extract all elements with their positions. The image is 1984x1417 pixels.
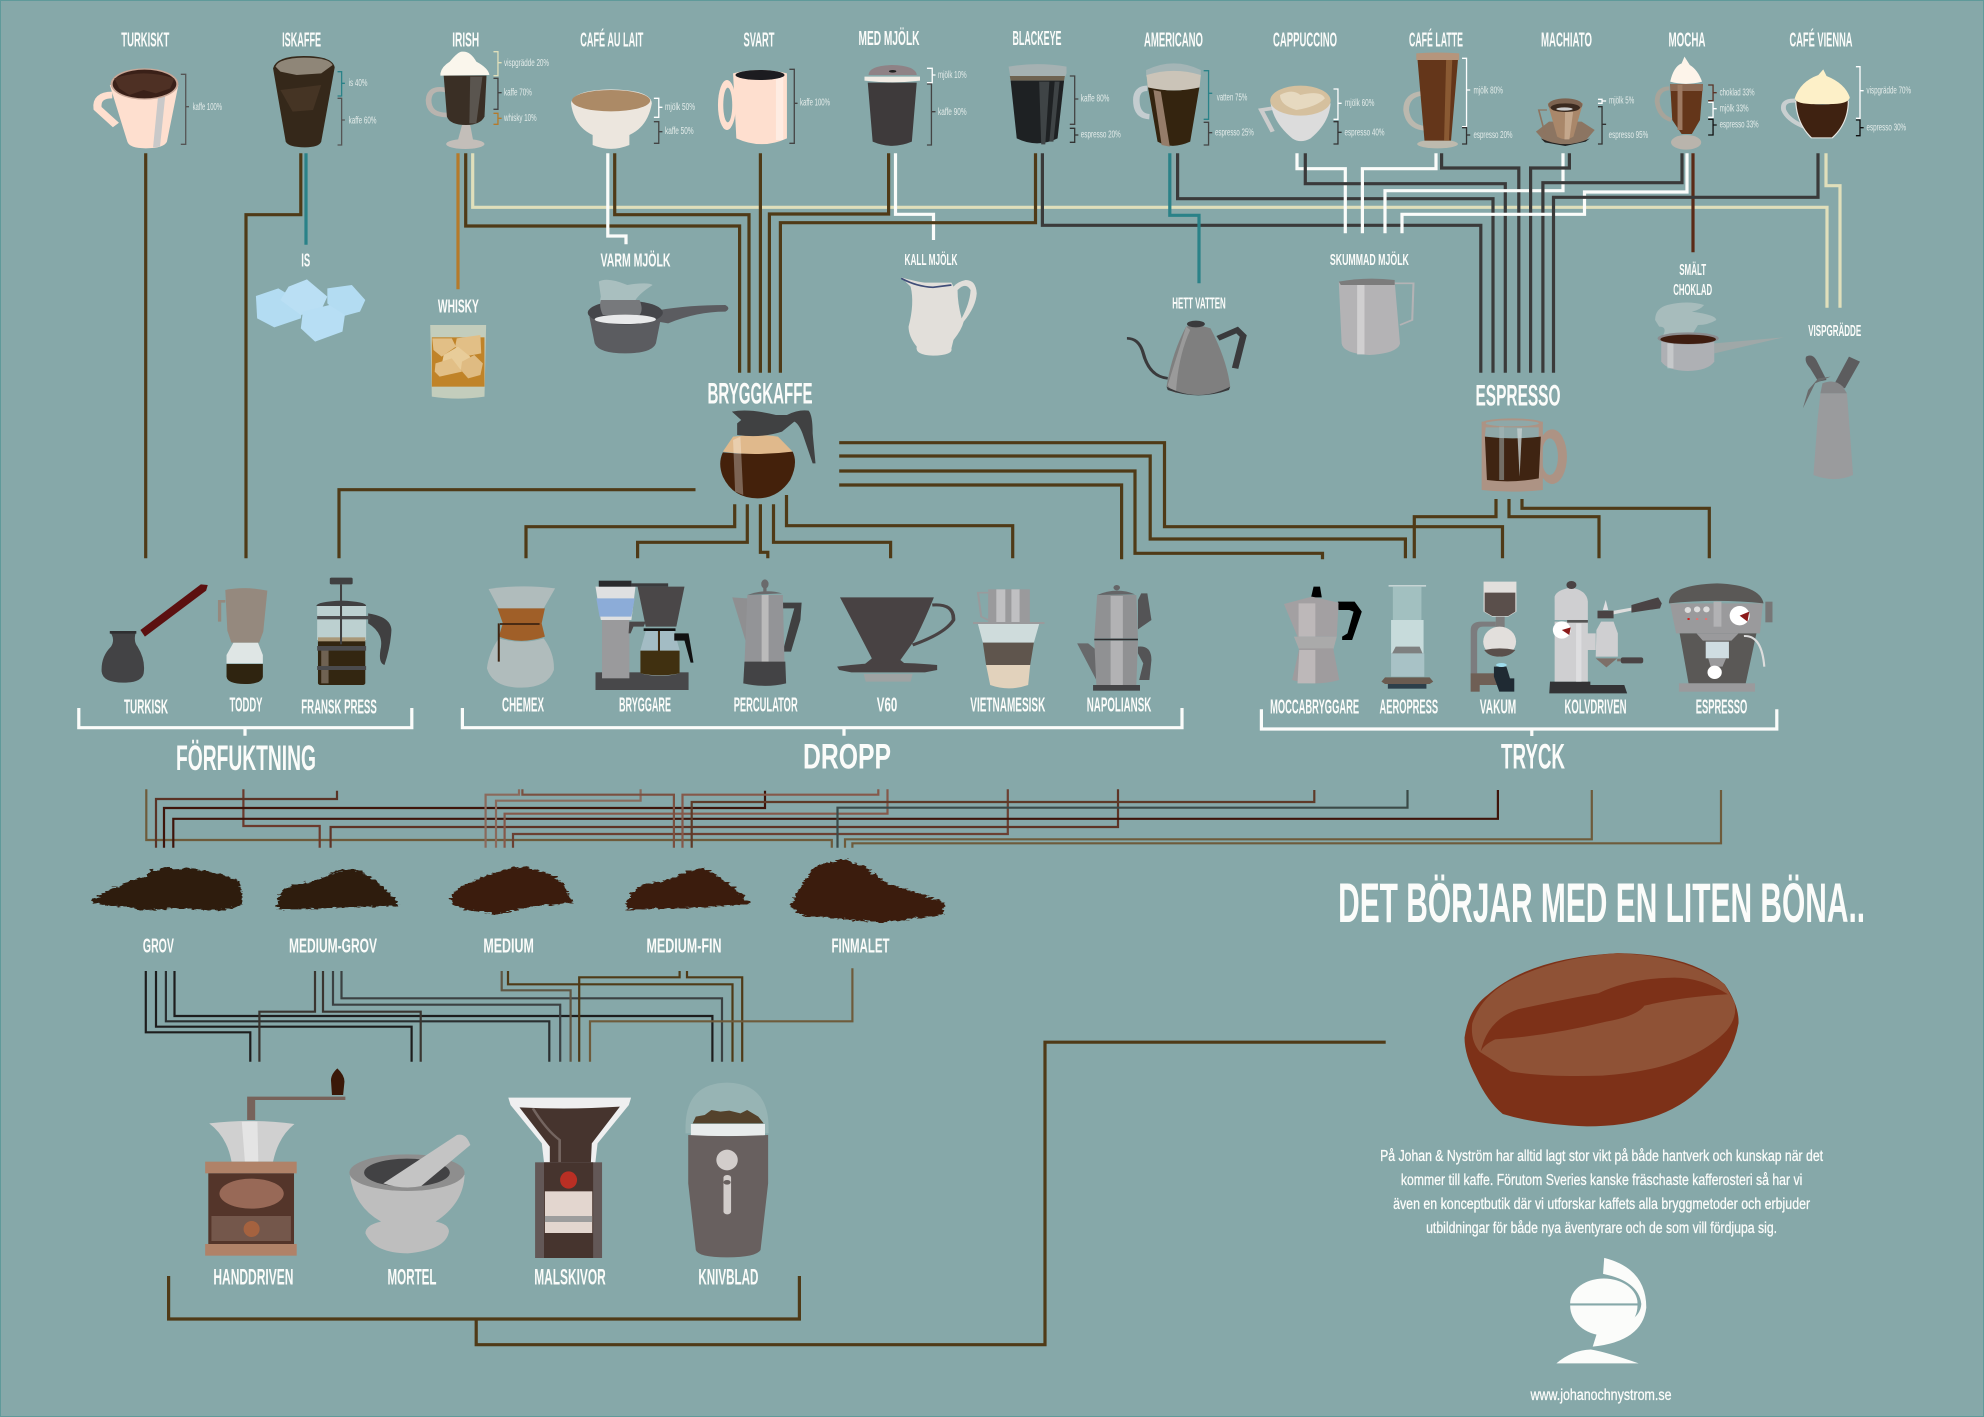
icon: french press bbox=[316, 578, 391, 685]
label: VAKUM bbox=[1480, 696, 1516, 718]
ingredient: vispgrädde bbox=[1803, 322, 1861, 479]
percentage label: espresso 33% bbox=[1720, 120, 1759, 131]
drink: blackeye: BLACKEYE bbox=[1012, 28, 1062, 50]
heading: ESPRESSO bbox=[1476, 380, 1560, 413]
label: MORTEL bbox=[388, 1264, 436, 1289]
percentage label: mjölk 50% bbox=[665, 102, 695, 113]
connector: cappuccino to skummad mjölk bbox=[1297, 153, 1345, 233]
icon: mocha glass bbox=[1657, 57, 1717, 150]
heading: TRYCK bbox=[1501, 737, 1565, 776]
connector: bryggkaffe to fransk press bbox=[339, 490, 696, 558]
brew method: turkisk bbox=[102, 584, 208, 718]
connector: bryggkaffe to v60 bbox=[774, 504, 891, 558]
label: FINMALET bbox=[832, 936, 890, 958]
percentage label: kaffe 60% bbox=[349, 115, 376, 126]
brew method: chemex bbox=[487, 586, 555, 717]
percentage label: vatten 75% bbox=[1217, 93, 1247, 104]
icon: irish glass bbox=[429, 52, 502, 149]
connector: grov to knivblad bbox=[174, 971, 712, 1062]
grinder: knivblad bbox=[686, 1083, 769, 1289]
brew method: espresso machine: ESPRESSO bbox=[1696, 696, 1747, 718]
drink: mocha bbox=[1657, 30, 1759, 150]
group: förfuktning bbox=[79, 578, 412, 778]
brew method: chemex: CHEMEX bbox=[502, 695, 544, 717]
percentage label: kaffe 100% bbox=[193, 102, 222, 113]
grinder: handdriven bbox=[205, 1068, 345, 1289]
connector: café au lait to bryggkaffe bbox=[615, 153, 749, 373]
connector: bryggkaffe to vakum bbox=[839, 443, 1502, 558]
connector: chemex to medium bbox=[486, 789, 519, 848]
brew method: perculator bbox=[732, 579, 802, 717]
percentage label: mjölk 10% bbox=[938, 70, 967, 81]
text block: intro: kommer till kaffe. Förutom Sveries kanske fräschaste kafferosteri så har vi bbox=[1401, 1171, 1802, 1189]
connector: espresso to kolvdriven bbox=[1509, 499, 1599, 558]
percentage label: mjölk 80% bbox=[1474, 85, 1503, 96]
label: MALSKIVOR bbox=[534, 1264, 606, 1289]
bracket bbox=[462, 708, 1182, 736]
brew method: fransk press: FRANSK PRESS bbox=[301, 696, 377, 718]
icon: coffee heap bbox=[278, 868, 399, 909]
brew method: napoliansk bbox=[1077, 585, 1152, 717]
connector: vakum to grov bbox=[173, 790, 1498, 848]
percentage label: espresso 40% bbox=[1344, 127, 1385, 138]
brew method: bryggare: BRYGGARE bbox=[619, 695, 671, 717]
percentage label: mjölk 60% bbox=[1345, 98, 1374, 109]
icon: coffee heap bbox=[92, 867, 242, 911]
text block: intro: även en konceptbutik där vi utforskar kaffets alla bryggmetoder och erbjuder bbox=[1393, 1196, 1811, 1213]
drink: turkiskt bbox=[97, 30, 222, 148]
connector: grinders to bean bbox=[169, 1042, 1386, 1345]
bracket bbox=[79, 708, 412, 736]
brew method: toddy: TODDY bbox=[230, 695, 263, 717]
icon: cup bbox=[97, 68, 189, 148]
icon: whisky glass bbox=[430, 325, 486, 399]
ingredient: varm mjölk bbox=[588, 251, 728, 353]
brew method: fransk press bbox=[301, 578, 391, 718]
icon: neapolitan flip pot bbox=[1077, 585, 1151, 691]
label: WHISKY bbox=[438, 297, 479, 317]
icon: toddy brewer bbox=[218, 588, 267, 684]
connector: iskaffe to is bbox=[304, 153, 308, 245]
label: MEDIUM bbox=[483, 936, 534, 958]
connector: café vienna to espresso bbox=[1554, 153, 1818, 373]
logo: globe with bean bbox=[1556, 1258, 1646, 1363]
percentage label: espresso 20% bbox=[1081, 130, 1121, 141]
connector: bryggkaffe to vietnamesisk bbox=[786, 495, 1013, 558]
connector: bryggkaffe to napoliansk bbox=[839, 485, 1122, 559]
label: VISPGRÄDDE bbox=[1808, 322, 1861, 340]
icon: chemex bbox=[487, 586, 555, 688]
brew method: espresso machine bbox=[1669, 583, 1772, 718]
percentage label: whisky 10% bbox=[503, 113, 537, 124]
connector: v60 to medium bbox=[505, 789, 888, 848]
icon: coffee heap bbox=[627, 868, 749, 909]
connector: blackeye to espresso bbox=[1042, 153, 1481, 373]
percentage label: vispgrädde 20% bbox=[504, 58, 549, 69]
percentage label: kaffe 90% bbox=[938, 107, 967, 118]
grinder: malskivor bbox=[508, 1098, 631, 1289]
connector: blackeye to bryggkaffe bbox=[780, 153, 1036, 373]
icon: phin filter bbox=[973, 589, 1044, 688]
percentage label: espresso 30% bbox=[1866, 123, 1906, 134]
drink: svart bbox=[718, 30, 830, 144]
connector: mocha to espresso bbox=[1543, 153, 1682, 373]
text block: intro: utbildningar för både nya äventyrare och de som vill fördjupa sig. bbox=[1426, 1219, 1777, 1237]
brew method: moccabryggare bbox=[1270, 587, 1362, 718]
ingredient: whisky bbox=[430, 297, 486, 399]
connector: bryggkaffe to moccabryggare bbox=[839, 471, 1322, 559]
connector: espresso to espressomaskin bbox=[1522, 499, 1709, 558]
connector: fransk press to grov bbox=[156, 791, 337, 848]
connector: medium to malskivor bbox=[502, 971, 571, 1062]
label: IS bbox=[301, 251, 310, 271]
panel: det börjar med en liten böna bbox=[1338, 871, 1865, 1404]
icon: cup on saucer bbox=[1536, 98, 1606, 146]
connector: espresso machine to finmalet bbox=[852, 790, 1721, 848]
website: www.johanochnystrom.se bbox=[1530, 1387, 1672, 1404]
connector: medium-grov to malskivor bbox=[333, 971, 560, 1062]
group: tryck: MOCCABRYGGARE bbox=[1270, 696, 1359, 718]
group: tryck: AEROPRESS bbox=[1380, 696, 1438, 718]
icon: cup with latte art bbox=[1261, 86, 1331, 141]
connector: chemex to medium-fin bbox=[522, 789, 674, 848]
ingredient: kall mjölk bbox=[901, 250, 977, 356]
connector: vietnamesisk to medium bbox=[513, 789, 1008, 848]
label: GROV bbox=[143, 936, 174, 958]
connector: aeropress to finmalet bbox=[838, 790, 1408, 848]
drink: café au lait bbox=[571, 29, 695, 149]
label: KALL MJÖLK bbox=[904, 250, 958, 269]
icon: pan with chocolate bbox=[1655, 302, 1784, 371]
heading: MED MJÖLK bbox=[858, 27, 920, 50]
grind: medium-grov bbox=[278, 868, 399, 958]
bracket bbox=[1261, 709, 1777, 736]
icon: siphon brewer bbox=[1471, 582, 1516, 692]
percentage label: kaffe 80% bbox=[1081, 94, 1109, 105]
drink: turkiskt: TURKISKT bbox=[121, 30, 169, 52]
label: VARM MJÖLK bbox=[600, 251, 670, 271]
icon: glass mug bbox=[1482, 418, 1567, 492]
drink: americano bbox=[1136, 30, 1254, 147]
icon: coffee bean bbox=[1465, 953, 1739, 1126]
icon: ice cubes bbox=[256, 279, 365, 342]
drink: café vienna bbox=[1783, 29, 1911, 138]
connector: bryggkaffe to bryggare bbox=[638, 504, 747, 558]
grind: finmalet bbox=[790, 859, 945, 958]
drink: cappuccino: CAPPUCCINO bbox=[1273, 30, 1337, 52]
grind: medium-fin bbox=[627, 868, 749, 958]
connector: café au lait to varm mjölk bbox=[608, 153, 626, 244]
drink: svart: SVART bbox=[744, 30, 774, 52]
heading: IRISH bbox=[452, 30, 479, 52]
icon: cream siphon bbox=[1803, 356, 1860, 479]
connector: mocha to smält choklad bbox=[1691, 153, 1695, 252]
icon: milk jug bbox=[901, 277, 977, 356]
connector: bryggkaffe to aeropress bbox=[839, 456, 1405, 558]
connector: med mjölk to bryggkaffe bbox=[769, 153, 889, 373]
percentage label: kaffe 70% bbox=[504, 88, 532, 99]
icon: mug bbox=[718, 69, 798, 144]
connector: v60 to medium-fin bbox=[682, 789, 878, 848]
percentage label: choklad 33% bbox=[1720, 88, 1755, 99]
icon: hand mill bbox=[205, 1068, 345, 1256]
icon: tall glass bbox=[1009, 64, 1078, 144]
percentage label: vispgrädde 70% bbox=[1866, 86, 1911, 97]
connector: irish to vispgrädde bbox=[473, 153, 1827, 308]
connectors: drinks to ingredients and base coffee bbox=[146, 153, 1840, 558]
drink: med mjölk bbox=[858, 27, 967, 146]
icon: v60 dripper bbox=[837, 597, 953, 682]
percentage label: kaffe 100% bbox=[800, 98, 830, 109]
icon: latte glass bbox=[1406, 52, 1470, 148]
ingredient: skummad mjölk bbox=[1330, 250, 1413, 355]
brew method: vietnamesisk bbox=[970, 589, 1046, 717]
drink: blackeye bbox=[1009, 28, 1121, 144]
percentage label: mjölk 5% bbox=[1609, 96, 1634, 107]
icon: moka pot bbox=[1284, 587, 1362, 683]
connector: finmalet to malskivor bbox=[590, 968, 852, 1062]
drink: irish bbox=[429, 30, 549, 149]
ingredient: smält choklad bbox=[1655, 261, 1784, 371]
icon: coffee heap bbox=[451, 866, 573, 914]
group: tryck bbox=[1261, 581, 1777, 776]
connector: espresso to aeropress bbox=[1414, 499, 1496, 558]
connector: bryggare to medium bbox=[496, 789, 641, 848]
connector: grov to handdriven bbox=[146, 971, 250, 1062]
connector: napoliansk to medium-grov bbox=[331, 789, 1118, 848]
label: MEDIUM-FIN bbox=[646, 936, 722, 958]
brackets bbox=[1333, 89, 1342, 144]
group: dropp: NAPOLIANSK bbox=[1087, 695, 1152, 717]
label: MEDIUM-GROV bbox=[289, 936, 377, 958]
group: dropp bbox=[462, 579, 1182, 776]
ingredient: hett vatten bbox=[1127, 295, 1243, 395]
icon: burr grinder bbox=[508, 1098, 631, 1258]
icon: blade grinder bbox=[686, 1083, 769, 1257]
connector: turkisk to finmalet bbox=[146, 789, 832, 848]
connector: kolvdriven to finmalet bbox=[845, 790, 1592, 848]
connector: grov to mortel bbox=[156, 971, 412, 1062]
label: SKUMMAD MJÖLK bbox=[1330, 250, 1409, 269]
heading: BRYGGKAFFE bbox=[708, 377, 812, 410]
connector: medium-grov to mortel bbox=[323, 971, 421, 1062]
connector: medium-fin to knivblad bbox=[687, 971, 742, 1062]
brew method: turkisk: TURKISK bbox=[124, 696, 168, 718]
icon: espresso machine bbox=[1669, 583, 1772, 692]
drink: café latte: CAFÉ LATTE bbox=[1409, 29, 1463, 52]
drink: mocha: MOCHA bbox=[1668, 30, 1706, 52]
drink: machiato: MACHIATO bbox=[1541, 30, 1592, 52]
percentage label: espresso 25% bbox=[1215, 127, 1254, 138]
icon: lever machine bbox=[1549, 581, 1662, 693]
icon: cup with cream bbox=[1783, 67, 1864, 138]
connectors: bryggkaffe and espresso to brew methods bbox=[339, 443, 1709, 559]
connector: americano to espresso bbox=[1178, 153, 1493, 373]
connector: bryggkaffe to perculator bbox=[760, 504, 768, 558]
icon: coffee maker bbox=[596, 581, 693, 690]
percentage label: mjölk 33% bbox=[1720, 104, 1749, 115]
icon: saucepan bbox=[588, 280, 728, 353]
icon: cezve bbox=[102, 584, 208, 683]
base: espresso bbox=[1476, 380, 1567, 492]
grinder: mortel bbox=[349, 1135, 470, 1289]
connector: café vienna to vispgrädde bbox=[1826, 153, 1840, 308]
label: HANDDRIVEN bbox=[213, 1264, 293, 1289]
grind: grov bbox=[92, 867, 242, 958]
label: V60 bbox=[877, 695, 897, 717]
brew method: aeropress bbox=[1380, 585, 1438, 718]
percentage label: espresso 20% bbox=[1474, 130, 1513, 141]
connector: medium to knivblad bbox=[508, 971, 732, 1062]
connectors: brew methods to grind sizes bbox=[146, 789, 1721, 848]
connector: mocha to skummad mjölk bbox=[1402, 153, 1687, 233]
icon: bowl bbox=[571, 89, 662, 149]
connector: perculator to grov bbox=[164, 791, 765, 848]
connector: irish to bryggkaffe bbox=[466, 153, 740, 373]
ingredient: hett vatten: HETT VATTEN bbox=[1172, 295, 1226, 312]
connector: toddy to medium-grov bbox=[243, 789, 320, 848]
ingredient: smält choklad: CHOKLAD bbox=[1673, 282, 1712, 299]
icon: kettle bbox=[1127, 321, 1243, 395]
connector: svart to bryggkaffe bbox=[759, 153, 762, 373]
brew method: bryggare bbox=[596, 581, 693, 717]
connector: medium-grov to handdriven bbox=[259, 971, 315, 1062]
drink: café latte bbox=[1406, 29, 1513, 148]
connector: turkiskt to turkisk bbox=[144, 153, 147, 558]
drink: iskaffe bbox=[273, 30, 376, 147]
drink: iskaffe: ISKAFFE bbox=[282, 30, 321, 52]
connector: irish to whisky bbox=[456, 153, 460, 289]
heading: DROPP bbox=[803, 737, 891, 776]
base: bryggkaffe bbox=[708, 377, 816, 498]
brew method: toddy bbox=[218, 588, 267, 717]
connectors: grind sizes to grinders bbox=[146, 968, 852, 1062]
drink: cappuccino bbox=[1261, 30, 1385, 144]
icon: iced glass bbox=[273, 56, 345, 147]
connector: machiato to espresso bbox=[1531, 153, 1569, 373]
connector: medium-grov to knivblad bbox=[342, 971, 722, 1062]
connector: machiato to skummad mjölk bbox=[1385, 153, 1563, 233]
connector: café latte to skummad mjölk bbox=[1362, 153, 1436, 233]
group: dropp: PERCULATOR bbox=[734, 695, 798, 717]
label: KNIVBLAD bbox=[698, 1264, 758, 1289]
text block: intro bbox=[1380, 1147, 1824, 1237]
ingredient: is bbox=[256, 251, 365, 342]
connector: med mjölk to kall mjölk bbox=[896, 153, 934, 240]
brew method: kolvdriven: KOLVDRIVEN bbox=[1564, 696, 1626, 718]
icon: coffee heap bbox=[790, 859, 945, 922]
drink: café vienna: CAFÉ VIENNA bbox=[1790, 29, 1852, 52]
brew method: vakum bbox=[1471, 582, 1516, 718]
grind: medium bbox=[451, 866, 573, 958]
drink: café au lait: CAFÉ AU LAIT bbox=[580, 29, 643, 52]
icon: glass mug bbox=[1136, 63, 1212, 147]
connector: americano to hett vatten bbox=[1170, 153, 1199, 283]
drink: americano: AMERICANO bbox=[1144, 30, 1203, 52]
text block: intro: På Johan & Nyström har alltid lagt stor vikt på både hantverk och kunskap när det bbox=[1380, 1147, 1824, 1165]
label: VIETNAMESISK bbox=[970, 695, 1046, 717]
icon: aeropress bbox=[1381, 585, 1433, 689]
drink: machiato bbox=[1536, 30, 1648, 146]
icon: mortar and pestle bbox=[349, 1135, 470, 1253]
connector: moccabryggare to medium-fin bbox=[692, 790, 1314, 848]
connector: cappuccino to espresso bbox=[1305, 153, 1505, 373]
heading: FÖRFUKTNING bbox=[176, 739, 316, 778]
connector: grov to malskivor bbox=[166, 971, 549, 1062]
icon: travel cup bbox=[864, 65, 936, 146]
connector: café latte to espresso bbox=[1442, 153, 1519, 373]
percentage label: kaffe 50% bbox=[665, 126, 694, 137]
brew method: kolvdriven bbox=[1549, 581, 1662, 718]
percentage label: espresso 95% bbox=[1609, 130, 1648, 141]
connector: medium-fin to malskivor bbox=[579, 971, 680, 1062]
icon: steel pitcher bbox=[1339, 279, 1413, 355]
label: SMÄLT bbox=[1679, 261, 1706, 279]
icon: percolator bbox=[732, 579, 802, 686]
brew method: v60 bbox=[837, 597, 953, 717]
percentage label: is 40% bbox=[349, 78, 367, 89]
connector: iskaffe to toddy bbox=[246, 153, 301, 558]
icon: glass carafe bbox=[720, 410, 816, 498]
connector: bryggkaffe to chemex bbox=[526, 504, 735, 558]
